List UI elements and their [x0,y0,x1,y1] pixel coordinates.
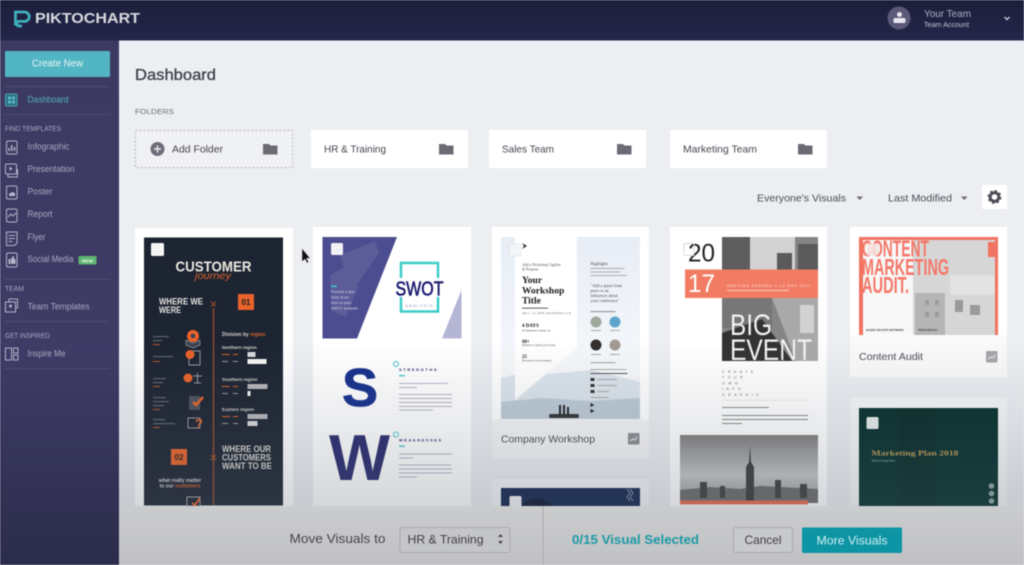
number box 01 [238,294,254,310]
plan title: Marketing Plan 2018 [872,448,959,458]
folder tile: Sales Team [489,130,646,168]
workshop title: Of immersive hands-on [522,328,551,332]
audit title: MARKETING [862,254,949,280]
nav item: Poster: Poster [28,186,53,196]
checkbox [866,417,878,429]
mountains [501,370,640,419]
triangle decoration [442,290,462,338]
create new button: Create New [32,58,84,70]
banner text: MEETING AGENDA // 12 NOV 2017 [727,284,811,288]
filter: everyone's visuals: Everyone's Visuals [757,194,846,204]
SWOT title frame [401,263,438,312]
page title: Dashboard [135,67,216,84]
left icons [184,330,203,431]
checkbox [684,244,694,256]
speaker captions [590,330,628,413]
new badge [78,256,96,264]
create your own text: OWN [722,382,741,386]
team account label: Team Account [924,20,970,29]
visual card: customer journey: Northern region [222,345,257,350]
add folder tile [136,130,292,168]
visual card: customer journey: Eastern region [222,407,254,412]
photo caption [331,289,359,310]
infographic title: CUSTOMER [176,258,252,276]
checkbox [510,496,522,508]
section heading: find templates: FIND TEMPLATES [5,124,61,133]
region bars [222,352,268,426]
selected count: 0/15 Visual Selected [572,532,699,547]
cancel button: Cancel [744,533,782,547]
letter W: W [329,421,391,494]
highlights column [590,261,626,312]
folder select: HR & Training [408,532,484,546]
year 17: 17 [688,270,715,298]
logo wordmark: PIKTOCHART [35,11,140,27]
icon: account chevron [1004,17,1010,20]
audit title [862,236,949,298]
create your own text: CREATE [722,370,757,374]
left captions [153,336,175,428]
paragraph lines [722,399,807,402]
highlights column: your conference" [590,298,620,303]
letter S: S [342,358,378,418]
highlights column: "Add a quote from [590,283,623,288]
section heading: team: TEAM [5,284,24,293]
more visuals button [802,528,902,553]
speaker portraits [590,316,602,328]
workshop title: Your [522,276,543,286]
workshop title: & Purpose [522,268,539,272]
settings button [982,185,1007,209]
city photo [913,240,995,335]
card footer [850,336,1007,377]
left sidebar [0,40,119,565]
create new button [5,51,110,77]
social icons [989,483,994,504]
photo caption: Provide a few [331,289,355,294]
top header bar [0,0,1024,40]
small captions: BASED ON DATA BETWEEN [866,328,904,332]
checkbox [151,243,164,256]
bottom action bar [119,506,1024,565]
cancel button [734,528,792,552]
weaknesses heading [394,432,443,447]
visual card: marketing plan [850,398,1007,508]
photo panel [322,237,397,338]
visual card: big event [670,227,827,508]
nav item: Inspire Me [6,348,66,360]
subheading: what really matter [158,478,201,484]
folder tile: Marketing Team [670,130,827,168]
photo caption: SWOT analysis. [331,306,359,310]
workshop title: Title [522,296,541,306]
workshop title: Minutes to guide you along [522,343,555,347]
visual card: SWOT analysis [313,227,471,508]
icon: team avatar [888,6,910,30]
folder tile: Marketing Team: Marketing Team [683,144,757,156]
create your own text: YOUR [722,376,746,380]
coral frame [859,237,998,335]
card footer [492,420,649,458]
checkbox [510,244,520,256]
bottom shading over content [119,340,1024,510]
nav item: Presentation: Presentation [28,164,75,174]
nav item: Infographic: Infographic [28,142,70,152]
empire state photo [680,435,818,501]
audit title: AUDIT. [862,272,909,298]
more visuals button: More Visuals [816,534,888,548]
nav item: Dashboard: Dashboard [28,94,69,104]
visual card: customer journey: WERE [159,305,181,316]
teal dash [331,286,337,287]
visual card: customer journey: to our customers [160,484,201,490]
card name: Content Audit [859,352,923,363]
folder tile: Sales Team: Sales Team [502,144,554,156]
create your own text: INFO [722,387,744,391]
nav item: Inspire Me: Inspire Me [28,348,66,358]
visual card: content audit [850,227,1007,377]
icon: plus circle [150,142,164,156]
highlights column: Highlights [590,261,609,266]
heading: where we were: WHERE WE [159,296,203,308]
checkbox [866,244,878,256]
logo note: Add your logo here [872,458,896,462]
SWOT title: SWOT [396,278,444,300]
logo arrow [522,243,527,249]
nav item: Flyer: Flyer [28,232,46,242]
visual card: customer journey: WANT TO BE [222,461,272,472]
strengths heading: STRENGTHS [399,367,438,372]
workshop title [522,263,572,362]
nav item: Poster [6,186,53,199]
icon: Piktochart logo [16,12,29,26]
section heading: get inspired: GET INSPIRED [5,331,50,340]
audit title: CONTENT [862,236,929,262]
workshop title: Add a Workshop Tagline [522,263,561,267]
analysis label: ANALYSIS [405,303,434,308]
icon: stats [986,351,998,362]
visual card: customer journey: 02 [175,453,184,462]
strengths heading [394,362,438,376]
big event title: BIG [730,309,772,342]
workshop title: 4 DAYS [522,324,539,329]
visual card: company workshop [492,227,649,458]
heading: where our customers want to be: WHERE OUR [222,444,271,455]
visual card: big event: EVENT [730,334,812,367]
silhouettes [549,414,579,418]
create your own text [722,370,762,397]
nav item: Presentation [6,164,75,177]
icon: mouse cursor [302,248,310,263]
team name: Your Team [924,8,971,20]
city photo [722,237,818,361]
icon: stats [628,433,640,444]
visual card: customer journey [135,228,293,508]
number box 02 [171,449,187,465]
visual card: customer journey: Southern region [222,377,258,382]
highlights column: influencer about [590,293,619,298]
move visuals label: Move Visuals to [290,531,386,546]
workshop title: Resources from industry [522,358,552,362]
nav item: Team Templates: Team Templates [28,302,90,312]
weaknesses heading: WEAKNESSES [399,438,443,442]
photo caption: intro to your [331,300,352,305]
strengths text lines [399,383,452,410]
photo caption: lines of an [331,294,349,300]
checkbox [331,243,343,255]
coral tab [988,242,995,257]
nav item: Social Media: NEW [82,258,94,264]
workshop title: Apr 5 - 11, 2018 | San Francisco, CA [522,311,572,316]
add folder tile: Add Folder [172,144,224,156]
bottom icon [187,497,200,506]
card name: Company Workshop [501,434,595,446]
workshop title: Workshop [522,286,564,296]
nav item: Dashboard [6,94,69,106]
workshop title: 25 [522,355,528,360]
nav item: Report [6,209,53,222]
visual card: customer journey: 01 [242,298,251,307]
nav item: Team Templates [6,299,90,312]
workshop title: 60+ [522,340,530,345]
folder tile: HR & Training [311,130,468,168]
folder tile: HR & Training: HR & Training [324,144,386,156]
visual card: customer journey: CUSTOMERS [222,452,271,464]
left icons: ? [195,416,203,431]
visual card: customer journey: journey [193,271,232,282]
filter: last modified: Last Modified [888,194,952,204]
nav item: Infographic [6,141,70,154]
weaknesses text lines [399,454,452,478]
visual card: navy partial [492,479,649,508]
create your own text: GRAPHIC [722,393,762,397]
highlights column: press or an [590,288,610,293]
nav item: Social Media: Social Media [28,254,74,264]
folders label: FOLDERS [135,107,174,116]
nav item: Social Media [6,253,96,267]
division by region text: Division by region [222,332,265,338]
year 20: 20 [688,240,715,268]
coral banner [685,270,818,298]
timeline [212,308,214,505]
nav item: Report: Report [28,209,53,219]
nav item: Flyer [6,232,46,246]
icon: folder [263,144,278,154]
coral strip [680,500,808,504]
folder select [400,528,510,552]
visual card: content audit: PREPARED BY [918,328,938,332]
white content panel [515,237,577,400]
